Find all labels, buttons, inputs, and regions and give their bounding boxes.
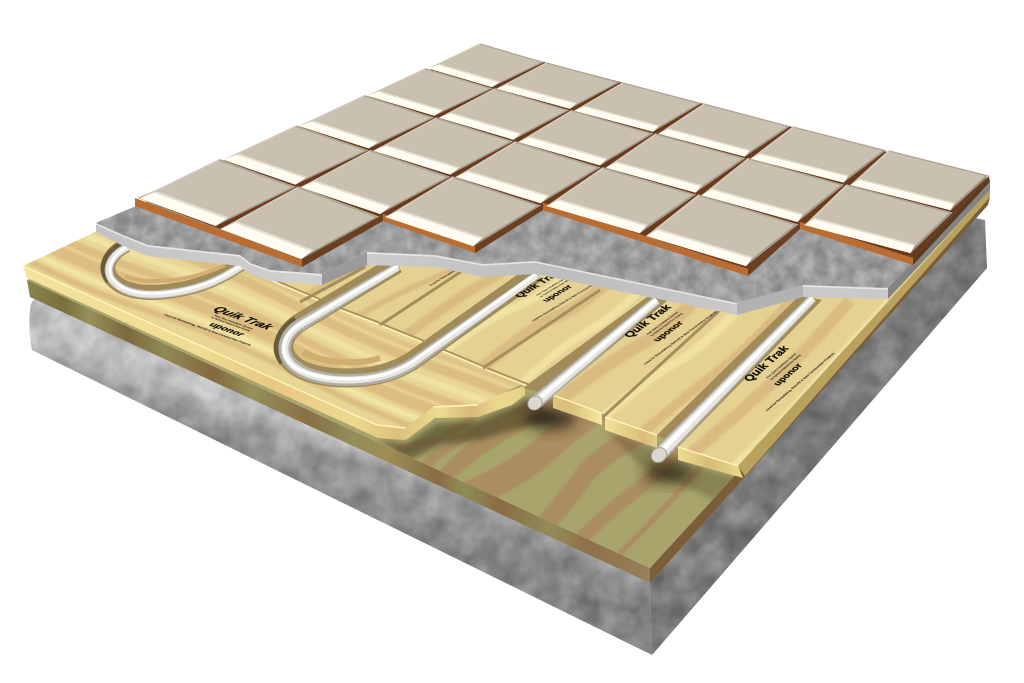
PEX tube: right straight run [648, 295, 816, 466]
logo: Quik Trak, back strip [493, 263, 606, 322]
concrete slab [29, 218, 987, 655]
subfloor right edge [650, 197, 990, 583]
ceramic tiles [139, 43, 989, 266]
subfloor wood grain [400, 395, 735, 553]
partial tagline between U arms: Used for Remodeling [428, 269, 457, 286]
subfloor wood layer [27, 196, 990, 583]
channel of large U [278, 264, 536, 378]
channel of small U [104, 244, 242, 292]
panel grain along front strip [28, 234, 524, 428]
thin-set mortar bed [135, 46, 990, 276]
cement edge highlight [96, 224, 888, 304]
logo: Quik Trak, bottom-left strip: uponor [206, 322, 246, 338]
tube channels [523, 295, 822, 447]
Quik Trak panel surface [22, 188, 990, 478]
empty grooves [300, 267, 720, 417]
PEX tube: middle straight run [525, 296, 660, 413]
subfloor front edge [27, 280, 650, 583]
logo: Quik Trak, bottom-left strip: for Hydronic Radiant Floor Heating [210, 316, 251, 332]
panel edge highlight [23, 266, 738, 466]
PEX tube: small U loop [109, 246, 243, 294]
PEX tube: large U loop [278, 264, 539, 386]
panel seam highlights [270, 279, 534, 388]
panel grain on back strips [305, 259, 926, 466]
logo: Quik Trak, bottom-left strip: Fast, Easy Installation System [213, 315, 255, 330]
logo: Quik Trak, right strip [722, 336, 836, 411]
logo: Quik Trak, bottom-left strip: Used for Remodeling, Retrofit & New Construction Projects [163, 313, 254, 347]
logo: Quik Trak, middle strip [601, 296, 718, 365]
gypsum cement layer [96, 60, 990, 315]
panel edges [23, 266, 435, 440]
shadows cast on subfloor [378, 398, 745, 500]
cement front edges [96, 223, 322, 285]
logo: Quik Trak, bottom-left strip [163, 296, 284, 347]
logo: Quik Trak, bottom-left strip: Quik Trak [210, 305, 278, 332]
